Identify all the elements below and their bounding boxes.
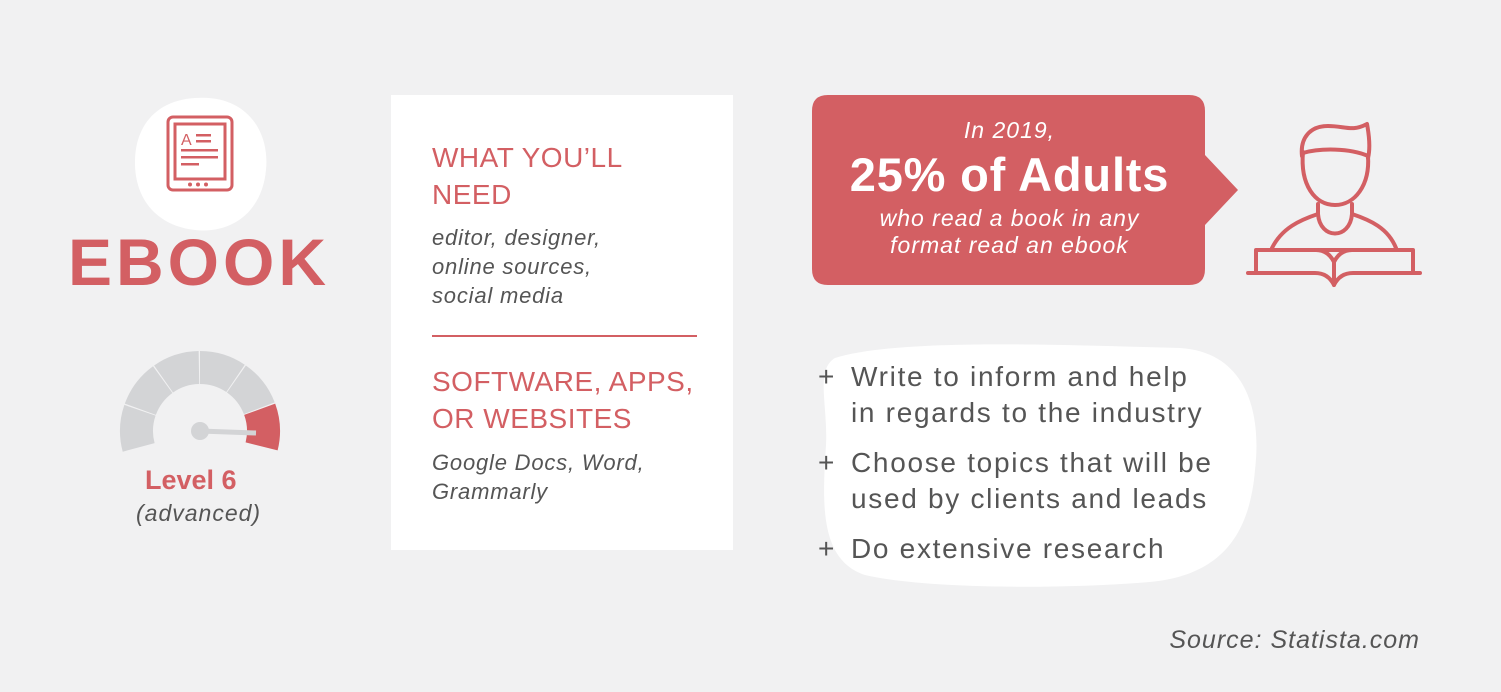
heading: software: SOFTWARE, APPS, [432,366,694,397]
icon: ebook tablet in white blob: A [181,132,192,149]
text: software list: Grammarly [432,479,548,504]
text: needs list: editor, designer, [432,225,601,250]
title: EBOOK: EBOOK [68,225,330,299]
bullets: tips list: + [818,361,836,392]
text: callout description: who read a book in any [880,205,1139,231]
text: needs list: social media [432,283,564,308]
label: (advanced): (advanced) [136,500,261,526]
blob: bullets background [824,344,1256,586]
bullets: tips list: Write to inform and help [851,361,1189,392]
text: source: Source: Statista.com [1169,626,1420,654]
label: Level 6: Level 6 [145,465,237,495]
heading: what you'll need [432,142,623,210]
bullets: tips list [818,361,1213,564]
text: needs list: online sources, [432,254,592,279]
icon: ebook tablet in white blob [135,98,266,230]
text: needs list [432,225,601,308]
text: 25% of adults: 25% of Adults [850,148,1169,201]
panel: what you'll need [391,95,733,550]
heading: what you'll need: NEED [432,179,512,210]
text: software list [432,450,644,504]
icon: person reading [1246,122,1422,288]
heading: software: OR WEBSITES [432,403,632,434]
text: callout description: format read an ebook [890,232,1129,258]
text: callout description [880,205,1140,258]
bullets: tips list: Do extensive research [851,533,1165,564]
bullets: tips list: in regards to the industry [851,397,1203,428]
callout: statistic [812,95,1238,285]
text: software list: Google Docs, Word, [432,450,644,475]
gauge: level meter [120,351,280,452]
bullets: tips list: + [818,533,836,564]
bullets: tips list: used by clients and leads [851,483,1208,514]
heading: software [432,366,694,434]
heading: what you'll need: WHAT YOU’LL [432,142,623,173]
bullets: tips list: + [818,447,836,478]
bullets: tips list: Choose topics that will be [851,447,1213,478]
text: in 2019: In 2019, [964,117,1055,143]
